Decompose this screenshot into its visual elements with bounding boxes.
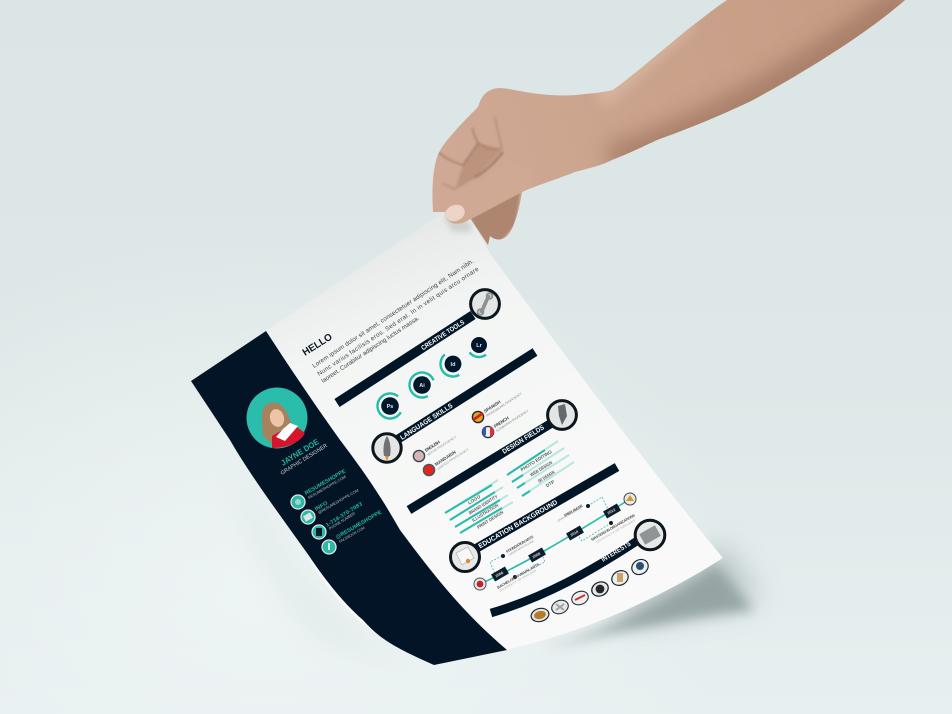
timeline tag: year three: 2010 [570,530,579,537]
language: Mandarin: MANDARIN [434,450,457,467]
interest icon: people [629,557,651,577]
contact: phone [312,501,364,539]
entry: masters: UNIVERSITY OF HARVARD [596,518,636,544]
intro paragraph: laoreet. Curabitur adipiscing luctus massa. [320,315,421,385]
skill: Lr [462,328,496,362]
skill labels: PHOTO EDITING [520,449,553,472]
timeline tag: year one [491,567,509,581]
name: JAYNE DOE [279,437,321,468]
paper shadow [240,470,760,668]
skill labels: ILLUSTRATION [471,502,500,523]
profile avatar [246,388,308,448]
header band: language skills: LANGUAGE SKILLS [399,402,455,442]
language: Mandarin: LIMITED PROFICIENCY [436,447,470,471]
interest icon: bike [570,589,590,607]
header band: language skills [392,352,535,443]
contact: facebook [322,509,383,554]
hello heading: HELLO [301,332,335,359]
timeline tag: year four: 2012 [607,508,616,515]
header band: design fields: DESIGN FIELDS [501,424,546,456]
section: design fields [409,401,576,533]
header band: education background [470,467,617,552]
skill labels: SR DESIGN [537,469,556,484]
intro paragraph: Lorem ipsum dolor sit amet, consectetuer adipiscing elit. Nam nibh. [311,258,475,370]
header band: interests [491,539,640,613]
contact: website: RESUMESHOPPE.COM [308,475,347,500]
entry: foundation arts: CARDIFF ARTS COLLEGE [508,539,535,557]
contact: facebook: @RESUMESHOPPE [335,509,383,541]
interest icon: cup [609,568,631,588]
header band: education background: EDUCATION BACKGROUND [478,499,559,550]
header band: interests: INTERESTS [600,541,633,564]
entry: masters: MASTERS IN ORGANIZATIONS [590,513,636,542]
timeline entries [496,504,636,593]
entry: bachelor: BACHELOR IN VISUAL ARTS [496,562,540,590]
skill: Lr: Lr [476,343,483,349]
contact: website [291,468,347,509]
contact: website: RESUMESHOPPE [304,468,347,497]
skill labels [467,449,556,530]
language: Spanish: PROFESSIONAL PROFICIENCY [485,391,523,418]
resume sheet [191,203,723,665]
contact: email [301,488,359,524]
contact: phone: 1-718-370-7083 [325,501,364,529]
entry: freelancer: GRAPHIC DESIGNER [556,506,582,523]
interest icon: basket [530,607,550,623]
section: language skills [373,352,535,476]
skill: Ps: Ps [387,404,393,410]
language: French: FRENCH [493,415,510,429]
contact: facebook: FACEBOOK.COM [338,526,366,544]
skill: Ai [405,368,439,402]
language: French [482,408,530,438]
entry: freelancer [556,504,590,523]
skill: Ps [373,389,407,423]
skill: Ai: Ai [419,383,425,389]
skill bars: right column [507,441,574,496]
timeline node: end [624,493,636,505]
timeline tag: year two: 2008 [532,552,541,559]
timeline node: start [474,578,486,590]
entry: foundation arts [501,535,535,558]
icon: pen nib [548,401,576,429]
icon: rocket [373,434,401,462]
header band: creative tools [337,315,473,403]
entry: foundation arts: FOUNDATION ARTS [506,535,535,554]
icon: wrench [471,290,499,318]
dashed connectors [490,497,611,577]
language: French: ELEMENTARY PROFICIENCY [495,408,530,433]
entry: freelancer: FREELANCER [564,504,584,518]
section: education background [450,467,636,593]
timeline tag: year four [603,504,621,518]
intro paragraph: Nunc varius facilisis eros. Sed erat. In in velit quis arcu ornare [316,266,481,378]
hand and forearm [432,0,905,245]
icon: tablet [635,520,665,550]
skill: Id: Id [451,362,455,368]
language: Mandarin [423,447,470,476]
skill bars: left column [445,480,513,533]
skill labels: DTP [545,479,555,488]
skill labels: WEB DESIGN [529,460,554,477]
skill labels: BRAND IDENTITY [468,494,499,516]
thumb cast shadow [443,215,472,232]
contact: phone: PHONE NUMBER [328,511,356,531]
language: English: ENGLISH [424,439,441,453]
section: interests [491,520,665,623]
timeline tag: year two [528,548,546,562]
thumb over sheet [443,160,535,224]
thumbnail [443,202,467,224]
skill: Id [436,347,470,381]
skill labels: PRINT DESIGN [476,509,505,530]
timeline tag: year one: 2006 [495,571,504,578]
header band: design fields [409,421,555,510]
skill labels: LOGO [467,494,482,505]
section: creative tools [337,290,499,423]
language: English: NATIVE PROFICIENCY [426,434,458,457]
language: Spanish: SPANISH [483,399,501,414]
contact list [291,468,383,554]
name: GRAPHIC DESIGNER [280,443,329,477]
language: English [413,434,458,462]
sidebar panel [191,331,507,665]
interest icon: tools [550,598,570,616]
contact: email: INFO [314,501,329,513]
entry: bachelor: UNIVERSITY OF ENGLAND [498,568,537,593]
header band: creative tools: CREATIVE TOOLS [420,319,466,352]
language: Spanish [472,391,523,423]
timeline [474,493,636,590]
contact: email: @RESUMESHOPPE.COM [318,488,359,515]
timeline tag: year three [566,526,584,540]
interest icon: camera [589,579,611,599]
icon: diploma [450,542,480,572]
